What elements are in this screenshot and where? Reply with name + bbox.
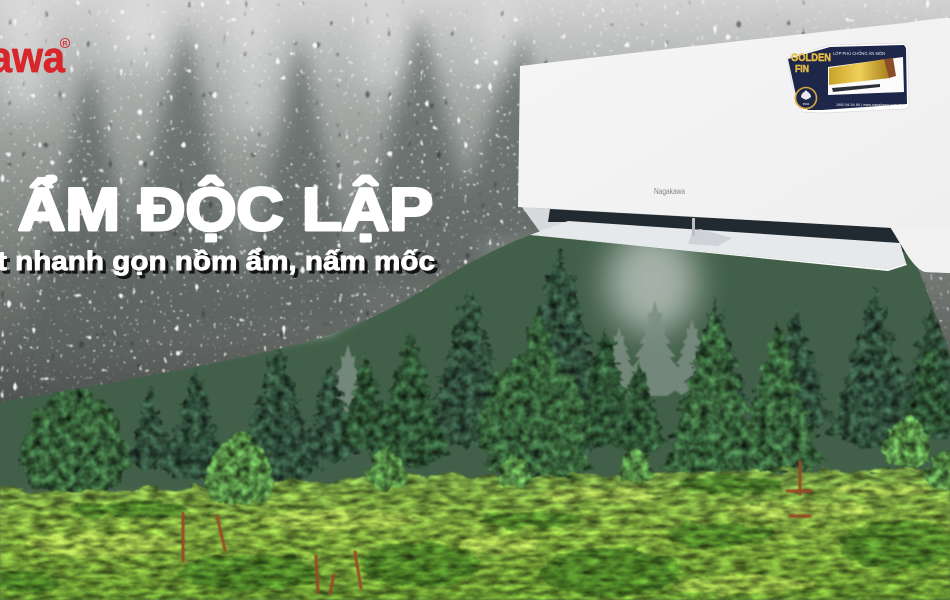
grass meadow — [0, 418, 950, 600]
sticker heading: GOLDEN — [791, 52, 831, 64]
red wildflowers — [183, 462, 811, 593]
subheading: t nhanh gọn nồm ẩm, nấm mốc — [0, 249, 438, 279]
flap hinge — [688, 229, 732, 246]
louver flap — [530, 221, 906, 269]
mid trees — [336, 327, 950, 466]
contact line: 1900 54 54 89 | www.nagakawa.com.vn — [836, 103, 902, 107]
sticker heading — [791, 52, 831, 75]
foreground shrubs — [205, 418, 950, 504]
misty distant trees — [318, 300, 716, 440]
golden fin sticker — [787, 43, 909, 113]
main body — [518, 18, 950, 273]
sticker heading: FIN — [795, 63, 809, 75]
golden fin sticker: LỚP PHỦ CHỐNG ĂN MÒN — [833, 50, 885, 56]
mini unit with gold fins — [828, 57, 904, 95]
subheading: t nhanh gọn nồm ẩm, nấm mốc — [0, 246, 435, 276]
brand name on unit: Nagakawa — [654, 186, 685, 196]
fog clearing — [606, 230, 698, 334]
left bracket — [522, 207, 568, 232]
rain glass panel — [0, 0, 950, 420]
dark back trees — [125, 248, 950, 483]
dark forest mass — [0, 225, 950, 495]
eco emblem: eco — [803, 101, 810, 106]
right side cap — [890, 227, 950, 273]
water droplets — [0, 0, 950, 420]
air conditioner unit — [518, 18, 950, 273]
blurred forest seen through the glass — [36, 18, 575, 328]
headline: ẨM ĐỘC LẬP — [18, 176, 433, 243]
vent slot — [528, 208, 905, 252]
foreground trees — [19, 306, 826, 494]
registered mark: R — [63, 40, 68, 48]
